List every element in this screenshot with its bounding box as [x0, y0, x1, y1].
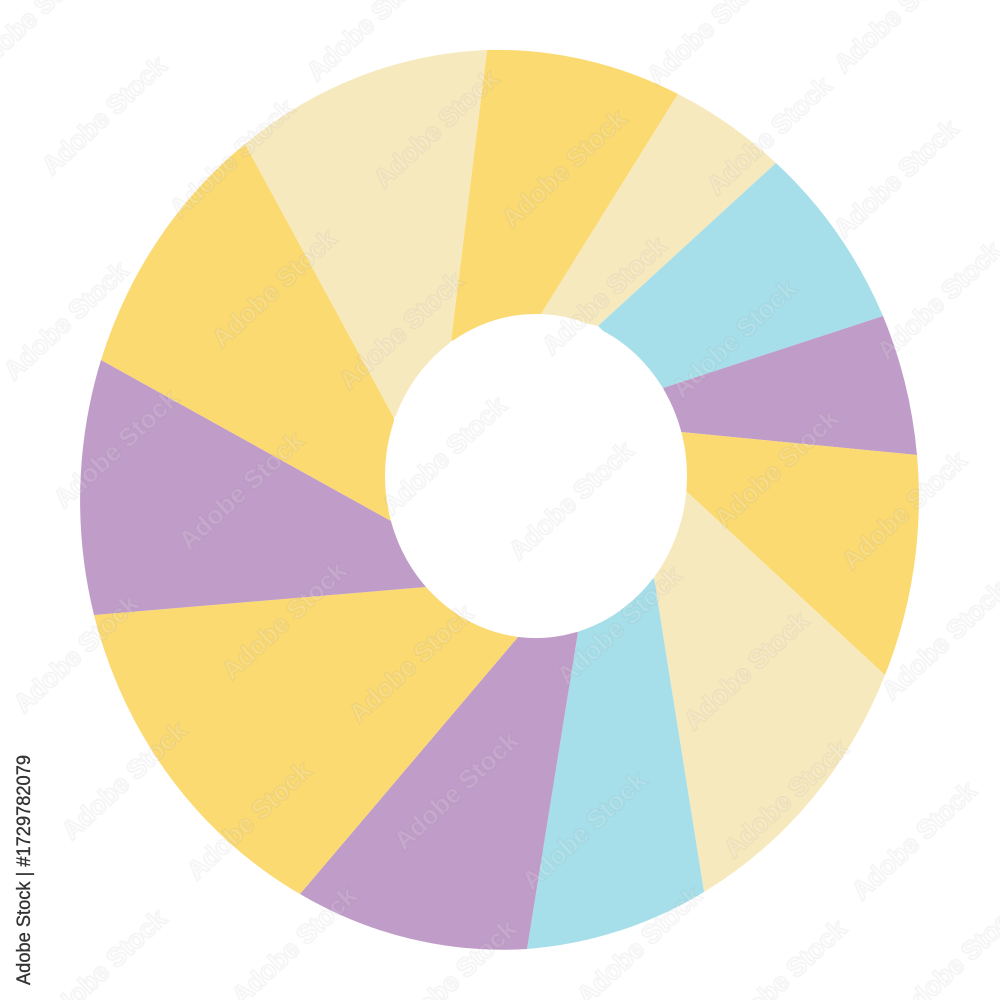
segment: yellow right	[681, 432, 919, 675]
watermark pattern: Adobe Stock	[368, 63, 505, 194]
watermark pattern: Adobe Stock	[678, 605, 815, 736]
watermark pattern: Adobe Stock	[846, 775, 983, 906]
segment: purple bottom	[300, 632, 578, 950]
watermark pattern: Adobe Stock	[836, 445, 973, 576]
stock id caption: Adobe Stock | #1729782079	[14, 755, 35, 985]
watermark pattern: Adobe Stock	[48, 383, 185, 514]
watermark pattern: Adobe Stock	[708, 403, 845, 534]
watermark pattern: Adobe Stock	[216, 555, 353, 686]
watermark pattern: Adobe Stock	[828, 113, 965, 244]
watermark pattern: Adobe Stock	[333, 265, 470, 396]
watermark pattern: Adobe Stock	[536, 230, 673, 361]
watermark pattern: Adobe Stock	[8, 588, 145, 719]
donut chart	[80, 50, 919, 950]
donut hole	[385, 314, 687, 638]
watermark pattern: Adobe Stock	[516, 765, 653, 896]
watermark pattern: Adobe Stock	[503, 435, 640, 566]
segment: cream lower right	[654, 491, 885, 892]
watermark pattern: Adobe Stock	[164, 93, 301, 224]
watermark pattern: Adobe Stock	[0, 255, 135, 386]
watermark pattern: Adobe Stock	[56, 715, 193, 846]
segment: purple right	[663, 316, 917, 455]
watermark pattern: Adobe Stock	[173, 425, 310, 556]
segment: cream upper left	[245, 50, 487, 418]
watermark pattern: Adobe Stock	[388, 725, 525, 856]
watermark pattern: Adobe Stock	[666, 273, 803, 404]
segment: yellow top	[451, 50, 678, 341]
watermark pattern: Adobe Stock	[718, 733, 855, 864]
segment: blue bottom	[527, 578, 704, 949]
watermark pattern: Adobe Stock	[376, 390, 513, 521]
segment: purple left	[80, 360, 426, 615]
watermark pattern: Adobe Stock	[36, 50, 173, 181]
watermark pattern: Adobe Stock	[343, 598, 480, 729]
segment: yellow upper left	[101, 144, 394, 521]
segment: blue upper right	[598, 163, 883, 388]
watermark pattern: Adobe Stock	[496, 103, 633, 234]
segment: yellow lower left	[94, 587, 518, 894]
watermark pattern: Adobe Stock	[181, 755, 318, 886]
watermark pattern: Adobe Stock	[701, 70, 838, 201]
watermark pattern: Adobe Stock	[551, 560, 688, 691]
watermark pattern: Adobe Stock	[206, 223, 343, 354]
segment: cream top right	[541, 94, 776, 326]
